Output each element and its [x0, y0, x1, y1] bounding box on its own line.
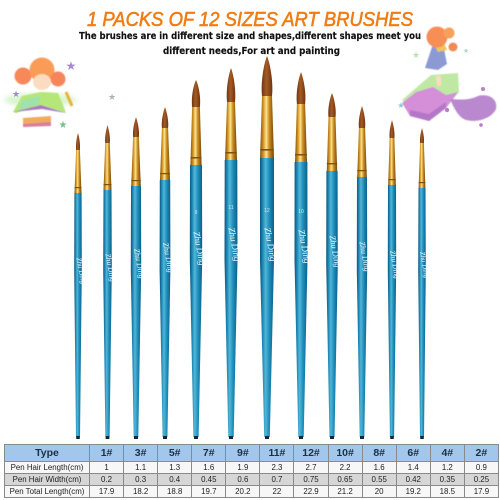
size specification table: 12#	[302, 447, 320, 459]
brushes	[74, 56, 431, 439]
size specification table: 22	[273, 486, 281, 496]
size specification table: 1	[104, 462, 109, 472]
size specification table: 9#	[237, 447, 249, 459]
size specification table: 5#	[169, 447, 181, 459]
illustration: girl reading a book	[4, 58, 116, 131]
size specification table: 1.3	[169, 462, 180, 472]
brush 11#: 11	[228, 205, 234, 211]
brush 10#: Zhu Ding	[297, 229, 312, 265]
size specification table: 1.9	[237, 462, 248, 472]
size specification table: Pen Hair Width(cm)	[13, 474, 81, 484]
subtitle: The brushes are in different size and shapes,different shapes meet you	[79, 31, 421, 42]
size specification table: 2.7	[306, 462, 316, 472]
brush 4#	[388, 120, 402, 439]
size specification table: Type	[35, 447, 59, 459]
illustration: girl reading a book: ★	[59, 120, 68, 131]
size specification table: 0.35	[440, 474, 455, 484]
brush 6#	[357, 106, 372, 439]
size specification table: Pen Hair Length(cm)	[11, 462, 83, 472]
size specification table: 0.2	[101, 474, 112, 484]
size specification table: 3#	[135, 447, 146, 459]
size specification table: 1.2	[442, 462, 453, 472]
size specification table: 0.75	[303, 474, 319, 484]
size specification table: 8#	[373, 447, 385, 459]
illustration: girl reading a book: ★	[12, 89, 20, 99]
size specification table: Pen Total Length(cm)	[10, 486, 84, 496]
illustration: girl reading a book: ★	[108, 92, 116, 102]
size specification table: 19.2	[406, 486, 421, 496]
brush 9#	[190, 80, 207, 439]
illustration: girl on a crystal with a purple paint blob: ★	[397, 101, 405, 110]
brush 12#: 12	[264, 208, 270, 214]
size specification table: 2.2	[340, 462, 351, 472]
brush 12#: Zhu Ding	[263, 227, 278, 263]
brush 7#: Zhu Ding	[161, 242, 175, 273]
illustration: girl on a crystal with a purple paint blob: ★	[463, 47, 469, 55]
brush 7#	[160, 107, 175, 439]
brush 10#: 10	[298, 209, 304, 215]
brush 1#	[74, 133, 87, 439]
title: 1 PACKS OF 12 SIZES ART BRUSHES	[87, 9, 414, 31]
size specification table: 20.2	[235, 486, 251, 496]
size specification table: 17.9	[99, 486, 114, 496]
size specification table: 0.3	[135, 474, 146, 484]
size specification table: 18.8	[167, 486, 182, 496]
size specification table: 19.7	[201, 486, 216, 496]
brush 1#: Zhu Ding	[75, 257, 87, 285]
brush 5#: Zhu Ding	[132, 248, 146, 279]
size specification table: 0.45	[201, 474, 216, 484]
brush 9#: 9	[195, 210, 198, 216]
size specification table: 0.4	[169, 474, 180, 484]
subtitle: different needs,For art and painting	[163, 46, 340, 57]
size specification table: 17.9	[474, 486, 489, 496]
size specification table: 2#	[476, 447, 487, 459]
size specification table: 0.25	[474, 474, 489, 484]
brush 6#: Zhu Ding	[358, 241, 372, 272]
size specification table	[4, 444, 499, 498]
size specification table: 0.42	[406, 474, 421, 484]
brush 5#	[131, 117, 146, 439]
size specification table: 1.4	[408, 462, 419, 472]
size specification table: 20	[375, 486, 384, 496]
size specification table: 4#	[441, 447, 453, 459]
size specification table: 21.2	[337, 486, 353, 496]
size specification table: 1.6	[203, 462, 214, 472]
subtitle	[79, 31, 421, 57]
size specification table: 1.6	[374, 462, 385, 472]
size specification table: 0.7	[271, 474, 282, 484]
brush 4#: Zhu Ding	[388, 250, 402, 280]
size specification table: 0.65	[337, 474, 353, 484]
size specification table: 18.2	[133, 486, 148, 496]
size specification table: 0.6	[237, 474, 248, 484]
size specification table: 7#	[203, 447, 215, 459]
size specification table: 2.3	[271, 462, 282, 472]
brush 10#	[294, 72, 312, 439]
brush 3#: Zhu Ding	[104, 253, 117, 283]
brush 11#	[224, 68, 242, 439]
size specification table: 1#	[101, 447, 112, 459]
size specification table: 10#	[336, 447, 354, 459]
brush 9#: Zhu Ding	[192, 231, 207, 267]
brush 2#: Zhu Ding	[418, 251, 431, 279]
size specification table: 0.55	[371, 474, 387, 484]
brush 11#: Zhu Ding	[227, 227, 242, 263]
illustration: girl reading a book: ★	[66, 59, 76, 73]
brush 12#	[260, 56, 278, 439]
brush 2#	[418, 128, 431, 439]
illustration: girl on a crystal with a purple paint blob	[397, 26, 496, 127]
size specification table: 1.1	[135, 462, 146, 472]
illustration: girl on a crystal with a purple paint blob: ★	[412, 50, 420, 60]
brush 8#: Zhu Ding	[328, 235, 343, 268]
size specification table: 18.5	[440, 486, 455, 496]
brush 3#	[103, 125, 117, 439]
size specification table: 6#	[407, 447, 419, 459]
brush 8#	[326, 93, 343, 439]
size specification table: 11#	[268, 447, 285, 459]
size specification table: 22.9	[303, 486, 319, 496]
size specification table: 0.9	[476, 462, 487, 472]
